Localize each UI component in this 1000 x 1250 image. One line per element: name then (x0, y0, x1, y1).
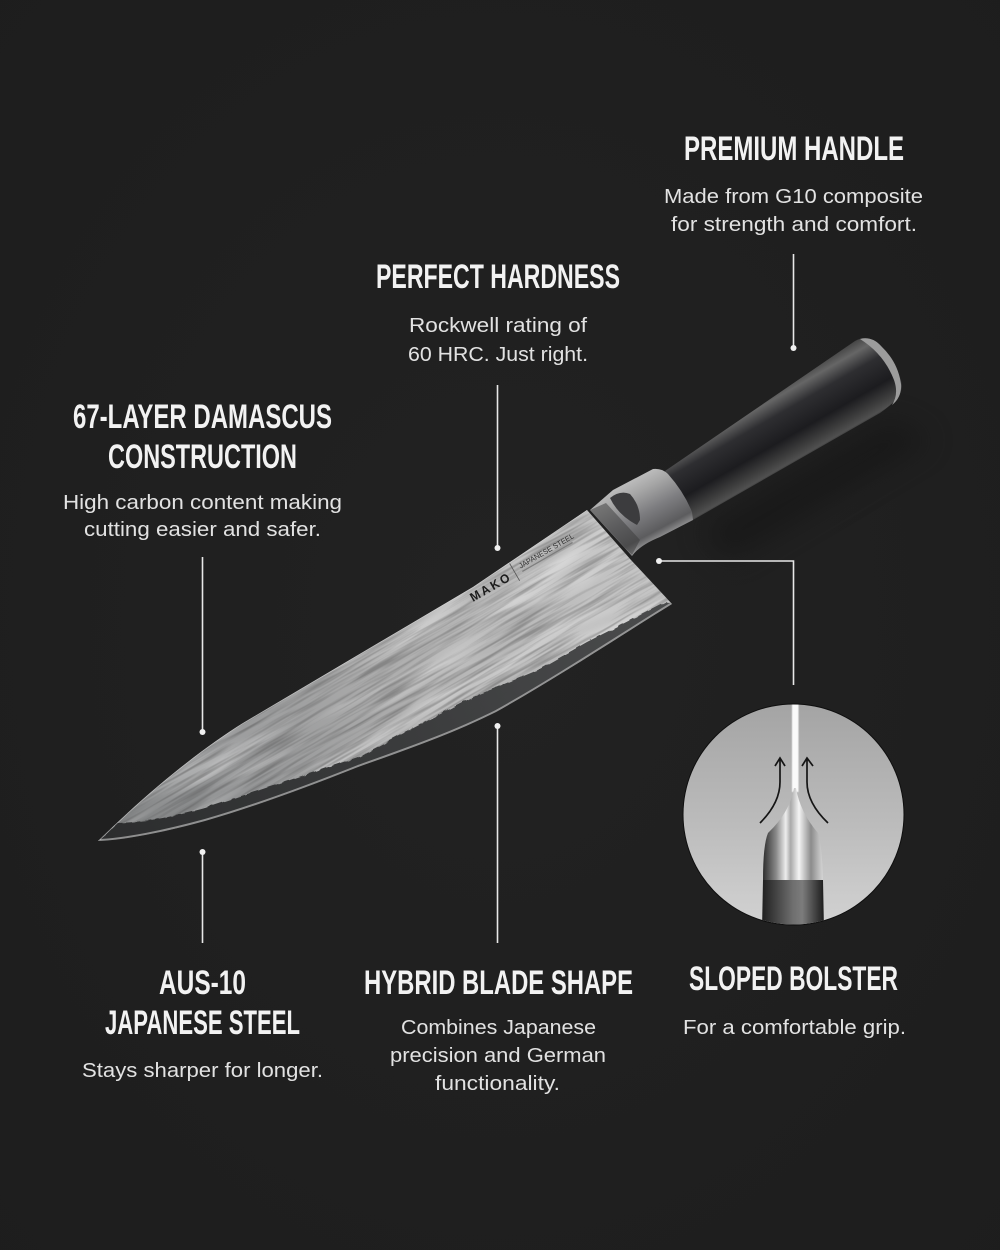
heading: JAPANESE STEEL (105, 1004, 300, 1042)
callout: premium handle (664, 130, 923, 236)
blade bevel (98, 602, 680, 845)
leader: perfect hardness (494, 385, 500, 551)
callout: perfect hardness (376, 258, 620, 366)
heading: 67-LAYER DAMASCUS (73, 398, 332, 436)
heading: HYBRID BLADE SHAPE (364, 964, 633, 1002)
callout: aus-10 steel (82, 964, 323, 1082)
heading: CONSTRUCTION (108, 438, 297, 476)
description: Stays sharper for longer. (82, 1059, 323, 1082)
callout: hybrid blade shape (364, 964, 633, 1095)
callout: damascus construction (63, 398, 342, 541)
description (63, 491, 342, 541)
description: precision and German (390, 1044, 606, 1067)
handle shadow (700, 420, 930, 560)
cutting edge highlight (100, 603, 672, 840)
heading: SLOPED BOLSTER (689, 960, 898, 998)
inset: sloped bolster detail (682, 700, 904, 930)
description: 60 HRC. Just right. (408, 343, 588, 366)
heading (105, 964, 300, 1042)
leader: damascus construction (200, 557, 206, 735)
blade (98, 510, 672, 841)
bolster collar (590, 503, 640, 555)
blade seen end-on (792, 700, 798, 792)
arrow right (802, 758, 828, 823)
blade logo (466, 529, 579, 606)
leader: aus-10 steel (200, 849, 206, 943)
heading: PREMIUM HANDLE (684, 130, 904, 168)
description (390, 1016, 606, 1095)
arrow left (760, 758, 785, 823)
bolster (590, 469, 693, 556)
heading: AUS-10 (159, 964, 246, 1002)
bolster recess (610, 493, 640, 525)
callout: sloped bolster (683, 960, 906, 1039)
bolster steel (763, 788, 823, 880)
spine highlight (98, 510, 587, 841)
leader: hybrid blade shape (494, 723, 500, 943)
heading (73, 398, 332, 476)
blade logo: MAKO (468, 569, 514, 605)
leader: sloped bolster (656, 558, 794, 685)
description: Combines Japanese (401, 1016, 596, 1039)
description: Rockwell rating of (409, 314, 587, 337)
leader: premium handle (790, 254, 796, 351)
description: Made from G10 composite (664, 185, 923, 208)
description: cutting easier and safer. (84, 518, 321, 541)
blade logo: JAPANESE STEEL (517, 532, 575, 570)
description (664, 185, 923, 236)
handle end (762, 880, 824, 924)
description: High carbon content making (63, 491, 342, 514)
heading: PERFECT HARDNESS (376, 258, 620, 296)
handle end cap (860, 338, 901, 405)
description: For a comfortable grip. (683, 1016, 906, 1039)
description: for strength and comfort. (671, 213, 917, 236)
handle (665, 338, 902, 520)
description: functionality. (435, 1072, 560, 1095)
knife illustration (98, 338, 902, 922)
description (408, 314, 588, 366)
